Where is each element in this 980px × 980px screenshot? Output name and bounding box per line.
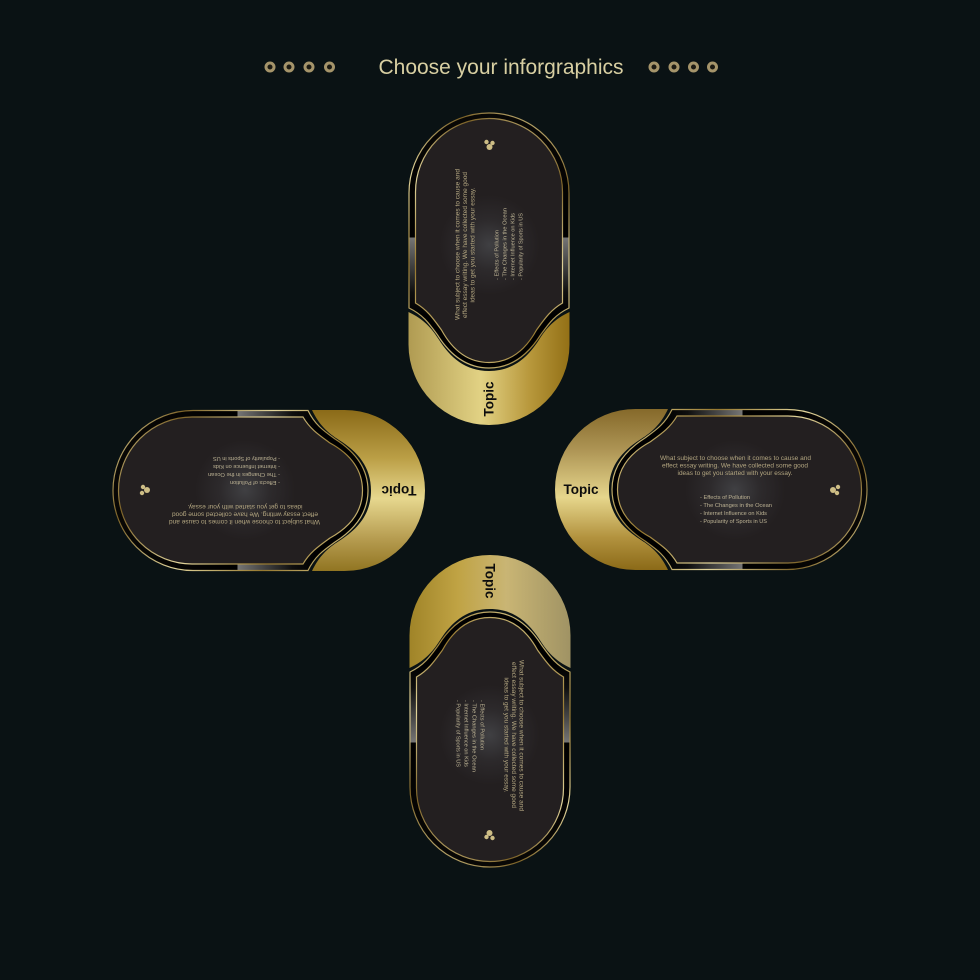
icon: nodes bbox=[830, 485, 840, 495]
topic label: Topic bbox=[482, 381, 496, 416]
topic list bbox=[700, 495, 772, 525]
body text: What subject to choose when it comes to cause and bbox=[660, 456, 811, 462]
gold crescent tab bbox=[408, 312, 570, 425]
topic list bbox=[454, 700, 484, 772]
topic list: - Effects of Pollution bbox=[494, 230, 500, 280]
topic list: - Popularity of Sports in US bbox=[454, 700, 460, 767]
topic list: - Popularity of Sports in US bbox=[700, 519, 767, 525]
body text bbox=[456, 169, 476, 320]
card body bbox=[618, 416, 862, 563]
body text: What subject to choose when it comes to cause and bbox=[456, 169, 462, 320]
body text: effect essay writing. We have collected some good bbox=[172, 510, 318, 516]
card frame bbox=[409, 113, 569, 368]
body text: ideas to get you started with your essay. bbox=[502, 678, 508, 793]
topic list: - Popularity of Sports in US bbox=[213, 455, 280, 461]
card frame bbox=[410, 612, 570, 867]
body text bbox=[502, 660, 524, 811]
topic label: Topic bbox=[564, 482, 599, 497]
body text bbox=[660, 456, 811, 477]
topic label: Topic bbox=[482, 564, 498, 599]
body text: What subject to choose when it comes to cause and bbox=[518, 660, 524, 811]
topic list: - The Changes in the Ocean bbox=[208, 471, 280, 477]
icon: nodes bbox=[484, 140, 495, 150]
panel: right card bbox=[555, 409, 867, 570]
card body bbox=[118, 417, 362, 564]
icon: nodes bbox=[140, 485, 150, 495]
topic label: Topic bbox=[381, 483, 416, 498]
body text: effect essay writing. We have collected some good bbox=[662, 464, 808, 470]
topic list: - Effects of Pollution bbox=[478, 700, 484, 750]
card body bbox=[416, 618, 564, 862]
left title dots bbox=[266, 63, 334, 71]
topic list bbox=[494, 208, 524, 280]
topic list: - Effects of Pollution bbox=[700, 495, 750, 501]
topic list: - Popularity of Sports in US bbox=[518, 213, 524, 280]
body text bbox=[169, 503, 320, 524]
topic list: - Effects of Pollution bbox=[230, 479, 280, 485]
body text: ideas to get you started with your essay. bbox=[678, 471, 793, 477]
panel: bottom card bbox=[410, 555, 570, 867]
panel: top card bbox=[408, 113, 570, 425]
body text: ideas to get you started with your essay. bbox=[470, 187, 476, 302]
topic list: - Internet Influence on Kids bbox=[700, 511, 767, 517]
topic list: - Internet Influence on Kids bbox=[462, 700, 468, 767]
gold crescent tab bbox=[312, 410, 425, 571]
topic list: - Internet Influence on Kids bbox=[510, 213, 516, 280]
card frame bbox=[113, 410, 368, 570]
topic list: - The Changes in the Ocean bbox=[470, 700, 476, 772]
gold crescent tab bbox=[555, 409, 668, 570]
right title dots bbox=[650, 63, 716, 71]
body text: What subject to choose when it comes to cause and bbox=[169, 518, 320, 524]
topic list bbox=[208, 455, 280, 485]
panel: left card bbox=[113, 410, 425, 571]
topic list: - The Changes in the Ocean bbox=[700, 503, 772, 509]
card body bbox=[416, 118, 562, 362]
body text: effect essay writing. We have collected some good bbox=[463, 172, 469, 318]
body text: ideas to get you started with your essay. bbox=[187, 503, 302, 509]
icon: nodes bbox=[484, 830, 495, 840]
gold crescent tab bbox=[410, 555, 570, 668]
topic list: - Internet Influence on Kids bbox=[213, 463, 280, 469]
title: Choose your inforgraphics bbox=[378, 56, 624, 79]
card frame bbox=[612, 410, 867, 570]
body text: effect essay writing. We have collected some good bbox=[510, 662, 516, 808]
topic list: - The Changes in the Ocean bbox=[502, 208, 508, 280]
